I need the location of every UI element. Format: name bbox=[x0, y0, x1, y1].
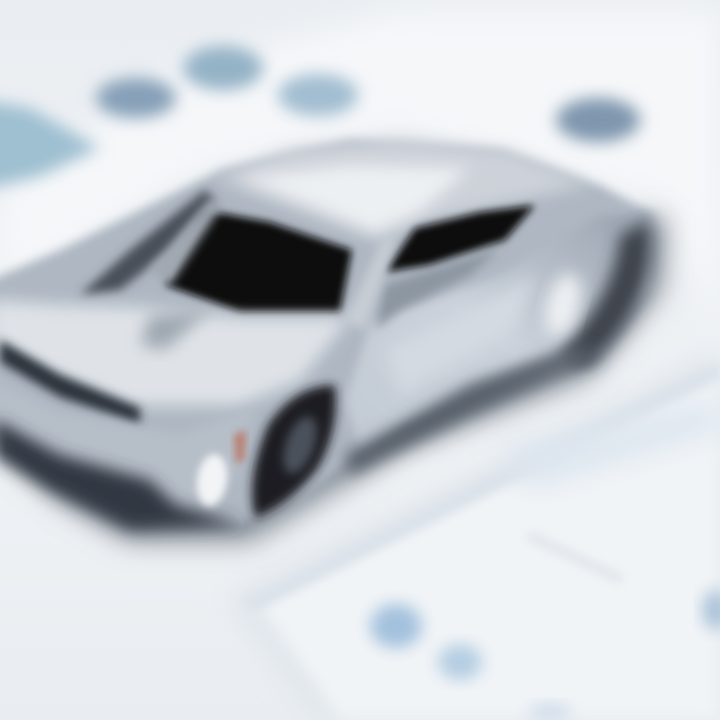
rear wheel bbox=[563, 220, 651, 366]
hood shutline bbox=[0, 340, 140, 424]
roof bbox=[215, 138, 590, 240]
windshield bbox=[165, 210, 352, 312]
front bumper bbox=[0, 378, 255, 505]
blue dots: top row bbox=[96, 46, 640, 142]
side window bbox=[385, 205, 535, 272]
document: bottom right bbox=[228, 350, 720, 720]
blue blob: left bbox=[0, 100, 100, 190]
pillar bbox=[345, 235, 395, 330]
document dots bbox=[370, 604, 422, 648]
hood bbox=[0, 300, 350, 405]
front wheel bbox=[252, 385, 336, 518]
red marker light bbox=[234, 430, 246, 464]
lower grille bbox=[0, 420, 245, 530]
car shadow bbox=[0, 215, 665, 540]
lower sill bbox=[345, 345, 600, 475]
headlight bbox=[194, 452, 230, 508]
background paper: top bbox=[0, 10, 720, 330]
side body bbox=[345, 215, 650, 450]
car body base bbox=[0, 140, 655, 525]
car bbox=[0, 138, 665, 540]
